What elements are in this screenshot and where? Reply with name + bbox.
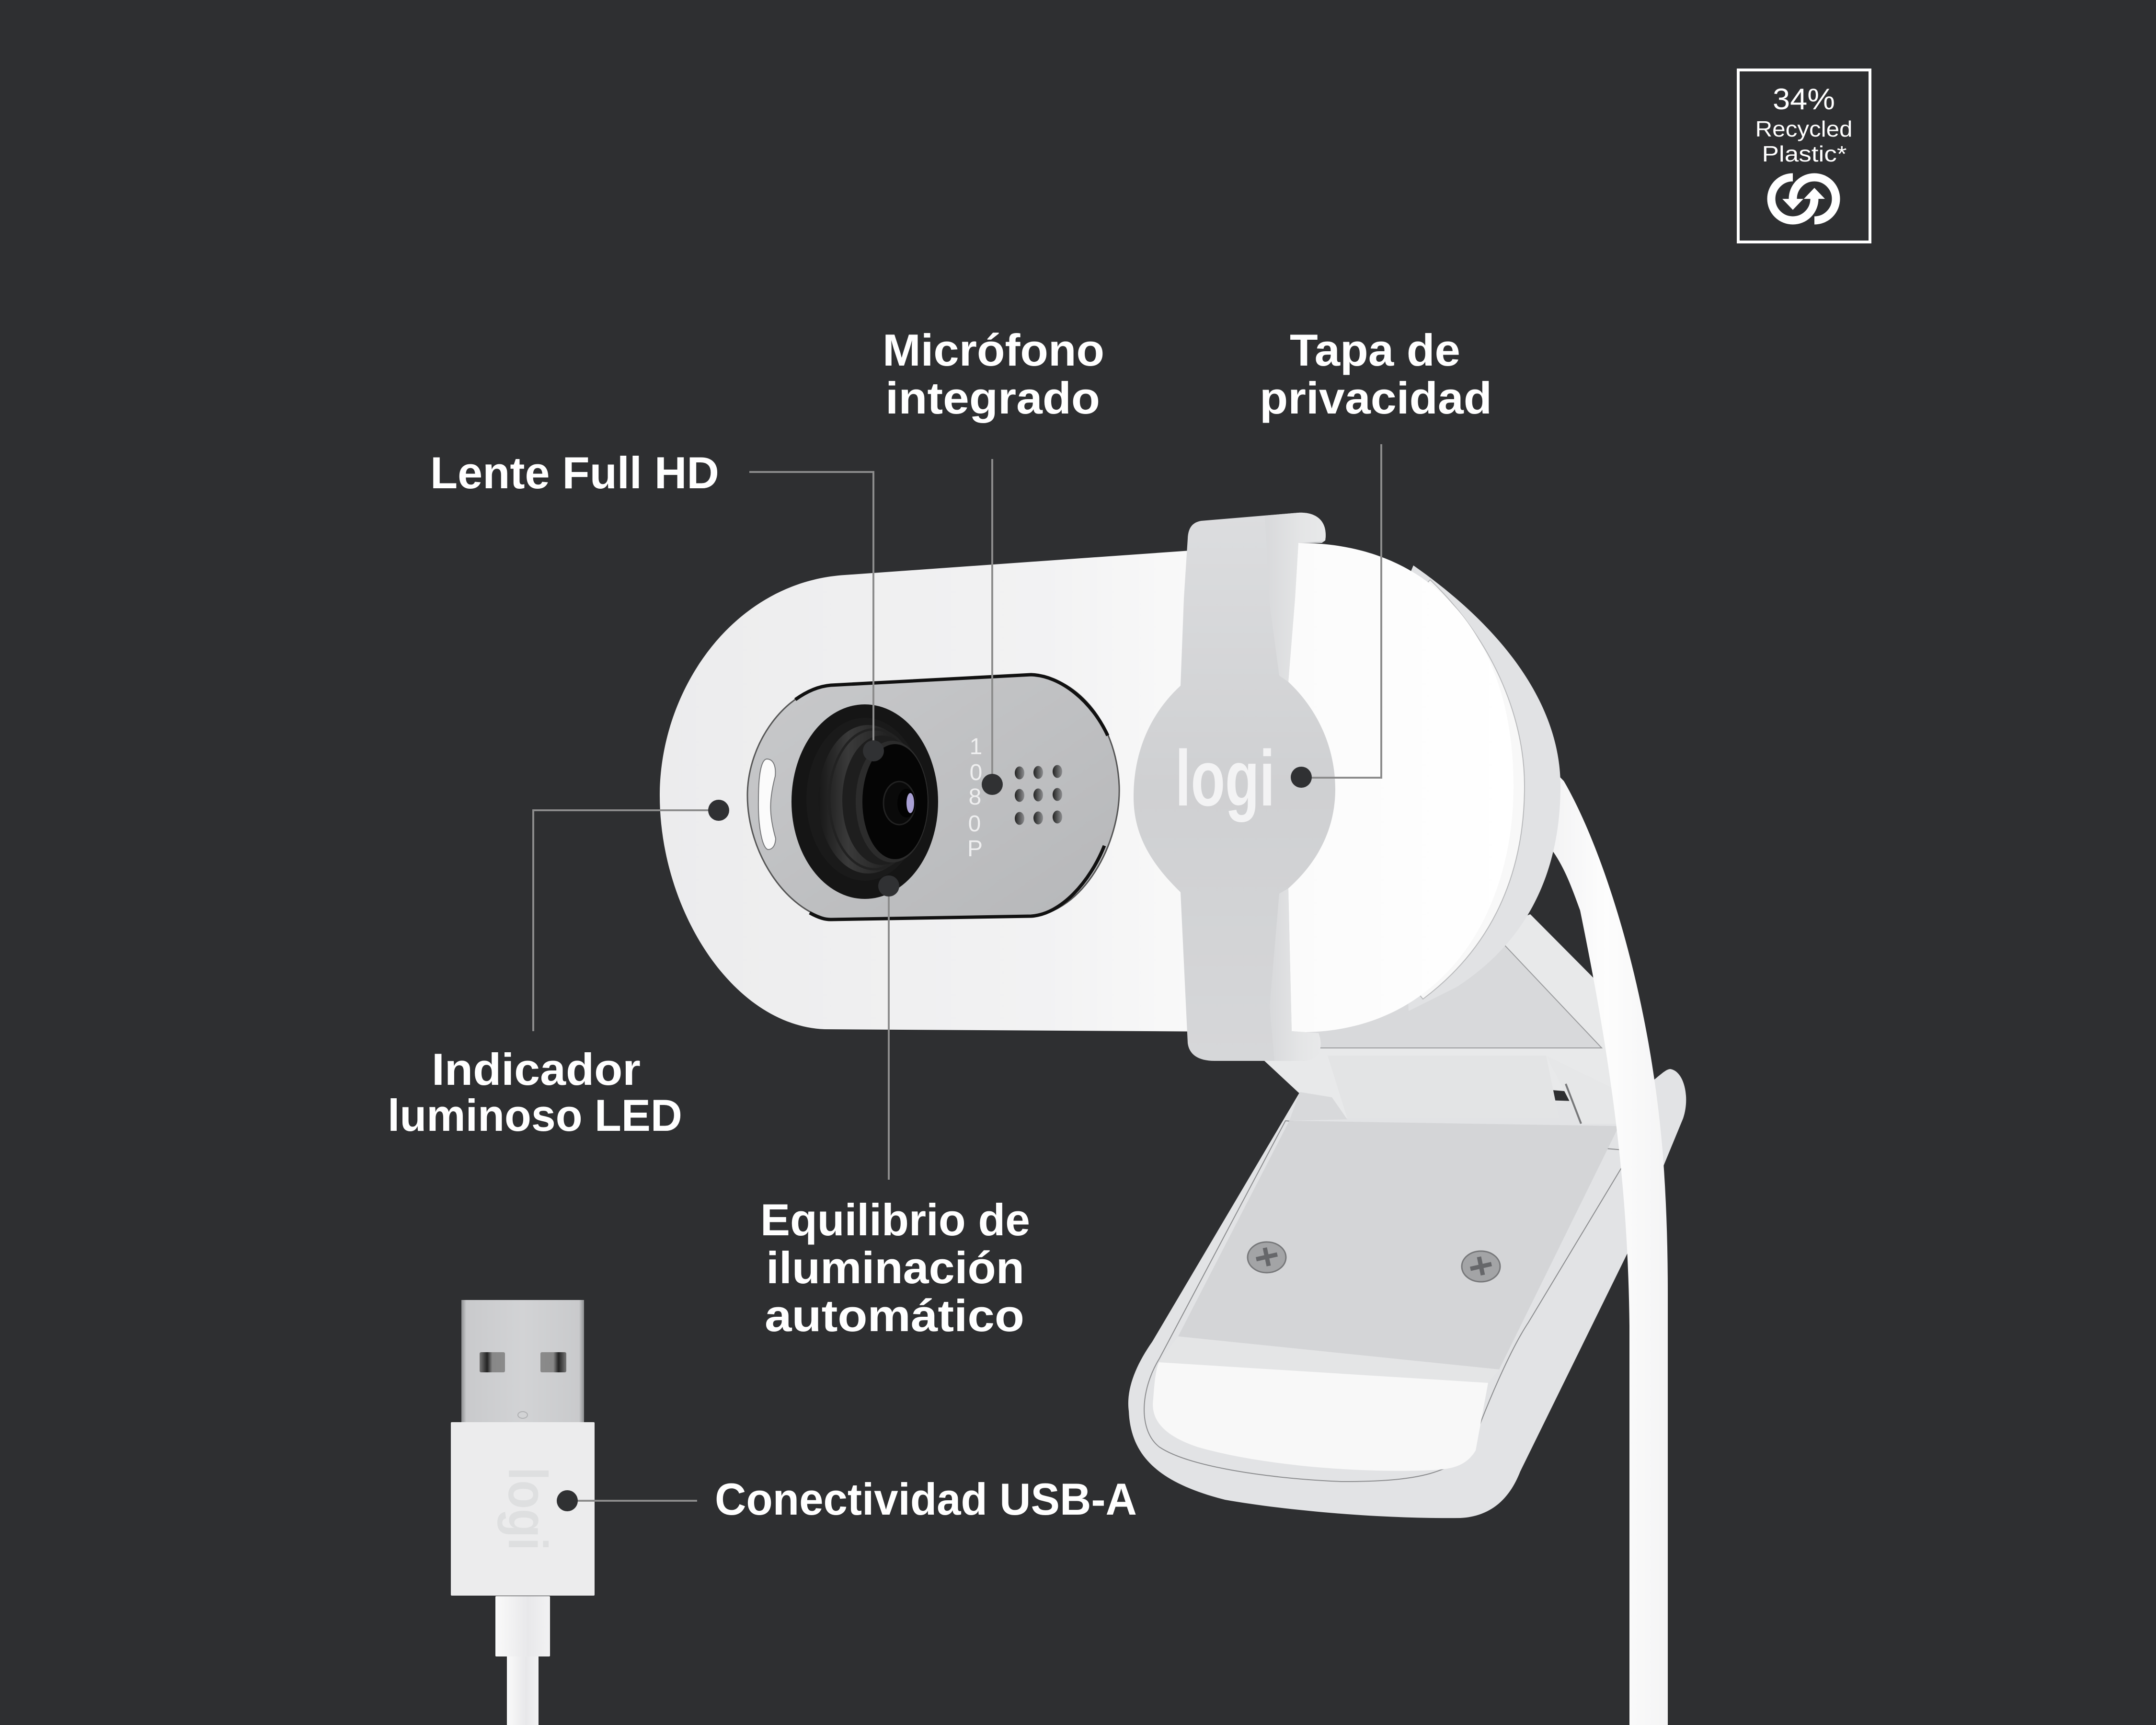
base hinge notch: [1289, 1092, 1347, 1121]
callout: Micrófono integrado: [883, 325, 1104, 795]
USB housing: [451, 1422, 595, 1596]
1080P marking: 0: [970, 760, 982, 785]
label line 1: Tapa de: [1290, 325, 1460, 375]
strap lip top: [1265, 513, 1326, 682]
label line 3: automático: [765, 1290, 1024, 1341]
arm inner plate: [1294, 944, 1602, 1048]
label line 2: integrado: [885, 373, 1100, 423]
logi logo on strap: logi: [1175, 734, 1275, 822]
webcam mount base clip: [1128, 1069, 1686, 1518]
hinge gap: [1566, 1084, 1581, 1124]
1080P marking: 1: [970, 734, 982, 759]
callout: Indicador luminoso LED: [388, 800, 729, 1140]
USB dimple: [518, 1412, 528, 1418]
privacy strap: [1134, 513, 1335, 1061]
badge text line 1: Recycled: [1755, 116, 1852, 141]
USB cord: [507, 1656, 539, 1725]
webcam body: [660, 513, 1560, 1061]
bezel bottom shadow: [810, 846, 1104, 920]
base inner panel: [1144, 1121, 1623, 1482]
base ridge: [1159, 1336, 1499, 1383]
camera bezel: [747, 675, 1119, 920]
label line 2: privacidad: [1260, 373, 1492, 423]
hinge left knuckle: [1257, 1054, 1347, 1118]
base plate: [1178, 1121, 1619, 1369]
USB metal shell: [461, 1300, 584, 1422]
label: Lente Full HD: [430, 448, 719, 498]
label line 1: Indicador: [432, 1044, 641, 1094]
callout: Equilibrio de iluminación automático: [760, 875, 1030, 1341]
callout: Lente Full HD: [430, 448, 884, 761]
USB strain relief: [495, 1596, 550, 1656]
USB slot right: [540, 1352, 566, 1372]
badge text line 2: Plastic*: [1762, 141, 1847, 166]
USB logi logo: logi: [497, 1467, 558, 1551]
hinge centre: [1328, 1056, 1559, 1118]
webcam cable: [1545, 762, 1668, 1725]
callout: Tapa de privacidad: [1260, 325, 1492, 788]
label line 1: Equilibrio de: [760, 1195, 1030, 1245]
1080P marking: [967, 734, 983, 862]
screw right: [1462, 1251, 1500, 1282]
label line 1: Micrófono: [883, 325, 1104, 375]
callout: Conectividad USB-A: [557, 1474, 1137, 1524]
hinge right: [1546, 1056, 1622, 1124]
badge percentage: 34%: [1773, 83, 1835, 116]
USB slot left: [480, 1352, 505, 1372]
icon: recycle arrows: [1771, 177, 1836, 220]
USB-A connector: [451, 1300, 595, 1725]
badge: 34% recycled plastic: [1738, 70, 1870, 242]
strap lip bottom: [1270, 888, 1321, 1061]
label: Conectividad USB-A: [715, 1474, 1137, 1524]
lens: [791, 704, 938, 899]
label line 2: iluminación: [766, 1242, 1024, 1293]
bezel top shadow: [795, 675, 1108, 736]
label line 2: luminoso LED: [388, 1090, 682, 1140]
microphone holes: [1015, 765, 1062, 825]
base grip pad: [1153, 1362, 1488, 1471]
LED indicator: [758, 759, 776, 850]
1080P marking: 0: [968, 811, 981, 837]
camera rim: [1389, 580, 1525, 999]
camera rear housing: [1389, 565, 1560, 1011]
camera front face: [660, 543, 1514, 1032]
1080P marking: 8: [969, 784, 981, 810]
1080P marking: P: [967, 836, 983, 862]
webcam arm: [1257, 914, 1639, 1124]
screw left: [1248, 1242, 1286, 1273]
